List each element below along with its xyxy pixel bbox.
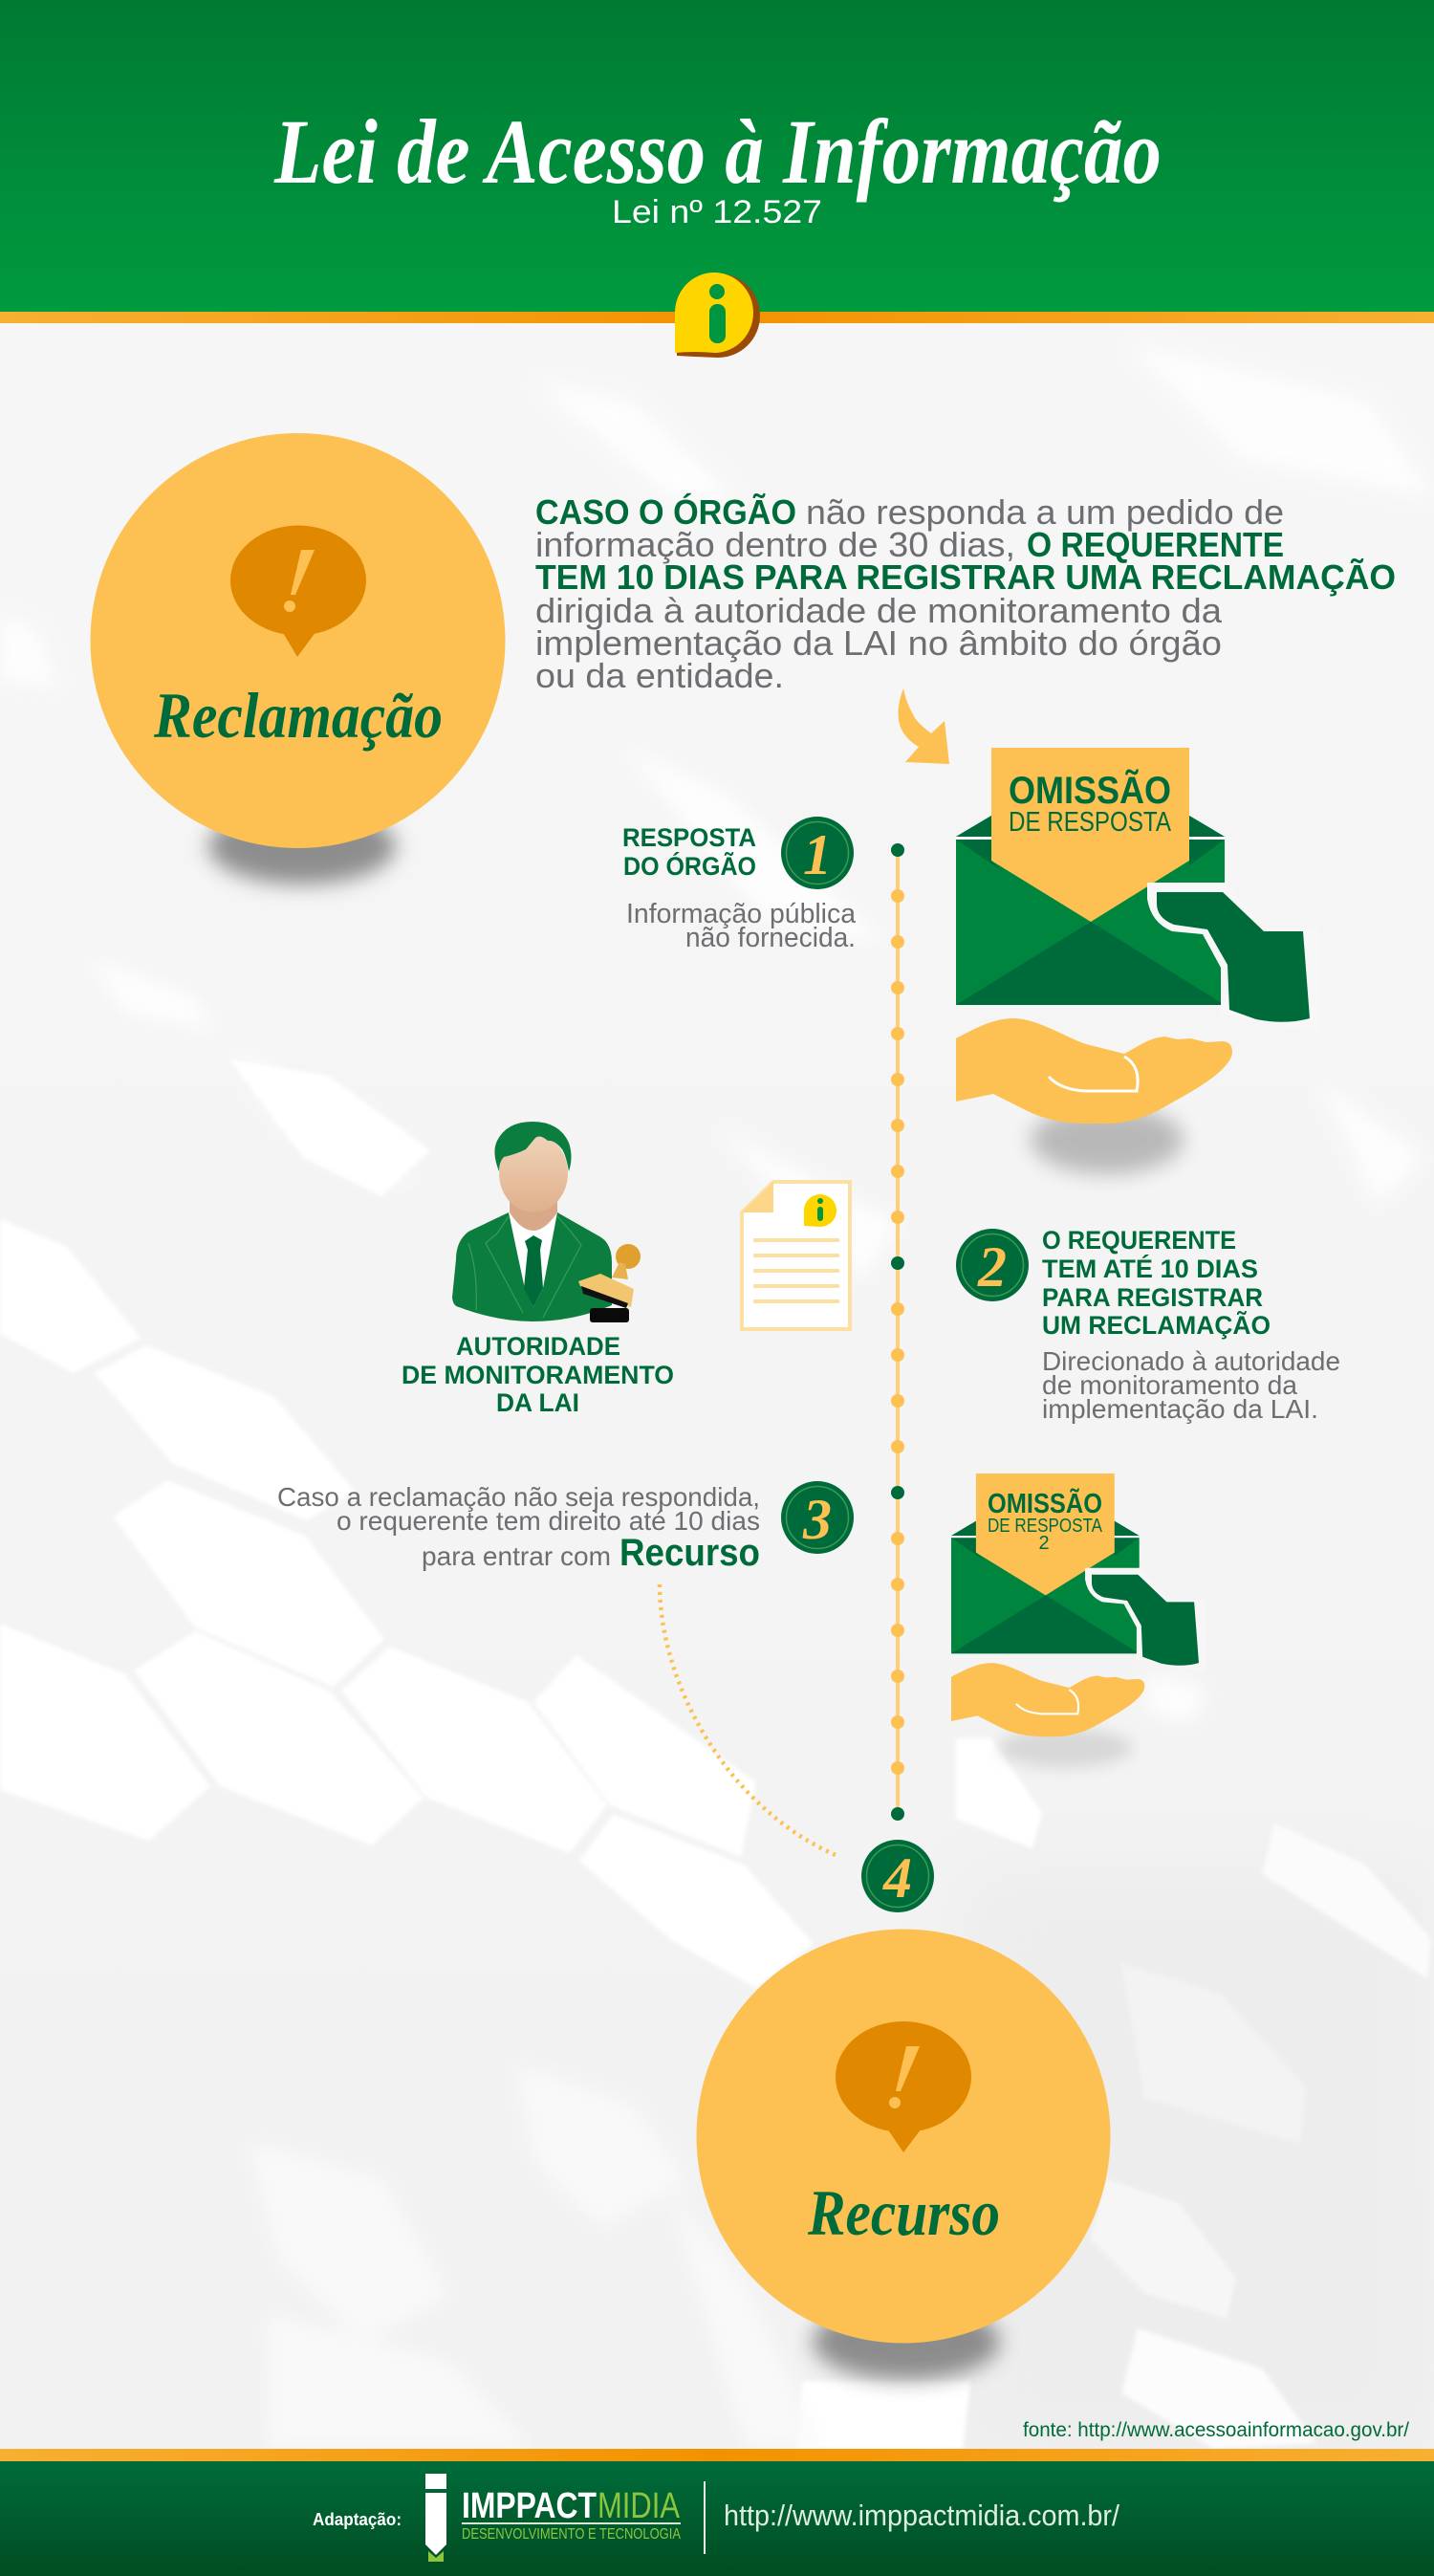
yellow circle (90, 433, 505, 848)
footer orange stripe (0, 2449, 1434, 2461)
small letter card (976, 1474, 1115, 1595)
circle heading: Reclamação (153, 679, 443, 752)
hand shadow (1031, 1105, 1184, 1174)
step 2 description: implementação da LAI. (1042, 1394, 1318, 1424)
step 1 description (626, 899, 857, 953)
step 2 description (1042, 1346, 1340, 1424)
step 3 badge: 3 (802, 1488, 832, 1551)
icon: document (742, 1182, 850, 1329)
step 3 keyword: Recurso (619, 1532, 760, 1574)
authority label: DE MONITORAMENTO (402, 1361, 674, 1389)
step 2 heading: O REQUERENTE (1042, 1226, 1236, 1255)
step 2 description: de monitoramento da (1042, 1370, 1297, 1400)
authority label (402, 1332, 674, 1417)
logo: wordmark: DESENVOLVIMENTO E TECNOLOGIA (462, 2526, 681, 2543)
small envelope (951, 1521, 1140, 1653)
arrow: from paragraph to envelope (898, 688, 949, 764)
footer band (0, 2461, 1434, 2576)
intro paragraph (535, 491, 1396, 695)
small hand giving (1085, 1568, 1206, 1673)
intro paragraph: implementação da LAI no âmbito do órgão (535, 623, 1222, 663)
hand receiving (956, 1018, 1232, 1124)
step 2 (956, 1226, 1340, 1424)
step 2 badge (956, 1229, 1029, 1301)
logo: wordmark: IMPPACT (462, 2486, 597, 2526)
small card title: OMISSÃO (988, 1487, 1102, 1519)
illustration: envelope and hands (956, 748, 1320, 1174)
intro paragraph: CASO O ÓRGÃO (535, 491, 796, 532)
card subtitle: DE RESPOSTA (1009, 807, 1172, 838)
step 2 heading: PARA REGISTRAR (1042, 1283, 1263, 1312)
panel: Reclamação (90, 433, 505, 884)
card title: OMISSÃO (1009, 768, 1171, 812)
source note: fonte: http://www.acessoainformacao.gov.br/ (1023, 2419, 1409, 2441)
hand shadow (998, 1728, 1132, 1768)
subtitle: Lei nº 12.527 (612, 194, 822, 230)
intro paragraph: TEM 10 DIAS PARA REGISTRAR UMA RECLAMAÇÃO (535, 557, 1396, 597)
step 2 heading (1042, 1226, 1271, 1340)
authority label: DA LAI (496, 1388, 579, 1417)
step 2 heading: UM RECLAMAÇÃO (1042, 1310, 1271, 1340)
step 3 description: o requerente tem direito até 10 dias (337, 1506, 760, 1536)
intro paragraph: não responda a um pedido de (806, 492, 1284, 532)
intro paragraph: O REQUERENTE (1027, 525, 1284, 564)
step 2 description: Direcionado à autoridade (1042, 1346, 1340, 1376)
step 3 (277, 1481, 854, 1574)
icon: alert speech bubble (836, 2021, 971, 2152)
footer divider (704, 2481, 706, 2554)
envelope (956, 816, 1225, 1005)
letter card (991, 748, 1189, 922)
step 1 heading: RESPOSTA (622, 823, 756, 852)
authority label: AUTORIDADE (456, 1332, 620, 1361)
adaptation label: Adaptação: (313, 2510, 402, 2529)
intro paragraph: dirigida à autoridade de monitoramento da (535, 591, 1223, 630)
illustration: monitoring authority (402, 1122, 674, 1417)
circle shadow (208, 808, 396, 884)
circle heading: Recurso (807, 2176, 1000, 2249)
logo: wordmark (462, 2486, 681, 2543)
hand giving (1147, 883, 1320, 1033)
intro paragraph: informação dentro de 30 dias, (535, 525, 1015, 564)
person (452, 1122, 612, 1321)
step 2 heading: TEM ATÉ 10 DIAS (1042, 1254, 1258, 1283)
step 4 badge: 4 (882, 1846, 912, 1910)
header orange stripe (0, 312, 1434, 323)
dotted curve to step 4 (660, 1584, 836, 1855)
icon: information bubble (675, 273, 760, 358)
small card number: 2 (1038, 1533, 1050, 1554)
title: Lei de Acesso à Informação (273, 100, 1162, 203)
yellow circle (696, 1930, 1111, 2343)
small card subtitle: DE RESPOSTA (988, 1516, 1103, 1537)
icon: stamp (578, 1244, 641, 1322)
step 3 description: Caso a reclamação não seja respondida, (277, 1482, 760, 1512)
step 1 badge: 1 (803, 823, 832, 886)
footer url: http://www.imppactmidia.com.br/ (724, 2499, 1119, 2532)
logo: pencil (425, 2474, 446, 2562)
icon: alert speech bubble (230, 526, 366, 657)
logo: wordmark: MIDIA (598, 2486, 681, 2526)
step 3 badge (781, 1481, 854, 1554)
step 3 description: para entrar com (422, 1541, 611, 1571)
illustration: small envelope and hands (951, 1474, 1206, 1768)
panel: Recurso (696, 1930, 1111, 2380)
step 1 (622, 817, 857, 953)
small hand receiving (951, 1663, 1144, 1736)
step 1 description: não fornecida. (685, 923, 856, 953)
header band (0, 0, 1434, 312)
step 1 description: Informação pública (626, 899, 857, 929)
step 4 badge (861, 1840, 934, 1912)
timeline (891, 843, 904, 1821)
intro paragraph: ou da entidade. (535, 656, 784, 695)
step 1 badge (781, 817, 854, 889)
step 2 badge: 2 (977, 1235, 1007, 1299)
step 1 heading: DO ÓRGÃO (623, 851, 756, 881)
circle shadow (813, 2303, 1000, 2380)
step 3 description (277, 1482, 760, 1571)
step 1 heading (622, 823, 756, 881)
